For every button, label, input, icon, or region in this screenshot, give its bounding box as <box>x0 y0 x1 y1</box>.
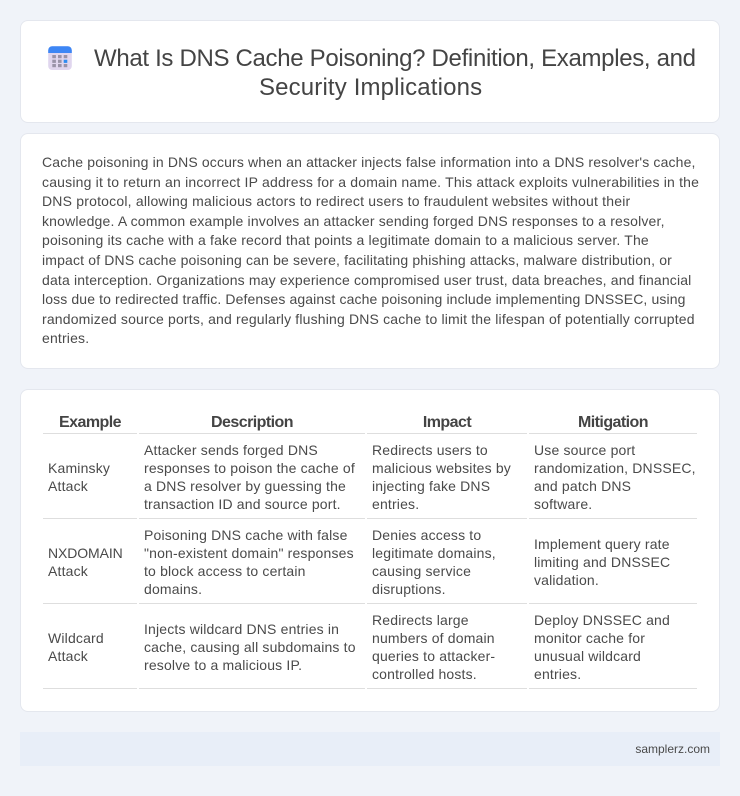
table row: Kaminsky Attack: software. <box>534 496 592 512</box>
table row: Wildcard Attack: Attack <box>48 648 88 664</box>
table row: Kaminsky Attack: entries. <box>372 496 419 512</box>
table header: Mitigation <box>578 414 648 431</box>
table row: Kaminsky Attack: Attacker sends forged DNS <box>144 442 318 458</box>
table row: NXDOMAIN Attack <box>43 527 697 604</box>
text block: definition <box>42 154 699 346</box>
table row: Kaminsky Attack: and patch DNS <box>534 478 631 494</box>
table row: Wildcard Attack: Wildcard <box>48 630 104 646</box>
text block: definition: poisoning its cache with a fake record that points a legitimate domain to a malicious server. The <box>42 232 649 248</box>
text block: definition: impact of DNS cache poisoning can be severe, facilitating phishing attacks, malware distribution, or <box>42 252 672 268</box>
table row: Wildcard Attack: queries to attacker- <box>372 648 495 664</box>
table row: Wildcard Attack: Redirects large <box>372 612 469 628</box>
table row: NXDOMAIN Attack: disruptions. <box>372 581 446 597</box>
table row: NXDOMAIN Attack: NXDOMAIN <box>48 545 123 561</box>
table header <box>43 414 697 434</box>
text block: definition: data interception. Organizations may experience compromised user trust, data breaches, and financial <box>42 272 691 288</box>
table row: Kaminsky Attack <box>43 442 697 519</box>
table row: Wildcard Attack: entries. <box>534 666 581 682</box>
icon: calendar <box>48 46 72 70</box>
table row: Wildcard Attack: numbers of domain <box>372 630 495 646</box>
table row: Kaminsky Attack: malicious websites by <box>372 460 511 476</box>
table row: Wildcard Attack: Deploy DNSSEC and <box>534 612 670 628</box>
table row: Kaminsky Attack: Kaminsky <box>48 460 110 476</box>
table header: Impact <box>423 414 471 431</box>
panel: examples table <box>20 389 720 712</box>
table row: Wildcard Attack: resolve to a malicious IP. <box>144 657 302 673</box>
table row: Wildcard Attack: Injects wildcard DNS entries in <box>144 621 339 637</box>
heading: title: What Is DNS Cache Poisoning? Definition, Examples, and <box>94 45 696 72</box>
text block: definition: DNS protocol, allowing malicious actors to redirect users to fraudulent websites without their <box>42 193 630 209</box>
table row: NXDOMAIN Attack: to block access to certain <box>144 563 306 579</box>
text block: definition: loss due to redirected traffic. Defenses against cache poisoning include implementing DNSSEC, using <box>42 291 686 307</box>
table row: NXDOMAIN Attack: Attack <box>48 563 88 579</box>
table row: NXDOMAIN Attack: Poisoning DNS cache with false <box>144 527 348 543</box>
table row: NXDOMAIN Attack: causing service <box>372 563 471 579</box>
panel: title card <box>20 20 720 123</box>
text block: definition: Cache poisoning in DNS occurs when an attacker injects false information into a DNS resolver's cache, <box>42 154 696 170</box>
table row: NXDOMAIN Attack: validation. <box>534 572 599 588</box>
heading: title <box>94 45 696 101</box>
panel: intro paragraph <box>20 133 720 369</box>
table header: Description <box>211 414 293 431</box>
table row: NXDOMAIN Attack: Denies access to <box>372 527 481 543</box>
table row: Kaminsky Attack: a DNS resolver by guessing the <box>144 478 346 494</box>
table row: Kaminsky Attack: transaction ID and source port. <box>144 496 341 512</box>
table row: Kaminsky Attack: Redirects users to <box>372 442 488 458</box>
footer text: site name: samplerz.com <box>635 742 710 756</box>
heading: title: Security Implications <box>259 74 482 101</box>
table row: Wildcard Attack: controlled hosts. <box>372 666 477 682</box>
table row: Kaminsky Attack: responses to poison the cache of <box>144 460 355 476</box>
table row: Wildcard Attack <box>43 612 697 689</box>
table row: Kaminsky Attack: Use source port <box>534 442 635 458</box>
table header: Example <box>59 414 121 431</box>
text block: definition: causing it to return an incorrect IP address for a domain name. This attack exploits vulnerabilities in the <box>42 174 699 190</box>
table row: NXDOMAIN Attack: limiting and DNSSEC <box>534 554 670 570</box>
table row: Kaminsky Attack: injecting fake DNS <box>372 478 490 494</box>
table row: Kaminsky Attack: Attack <box>48 478 88 494</box>
table row: NXDOMAIN Attack: domains. <box>144 581 202 597</box>
footer bar <box>20 732 720 766</box>
table row: Kaminsky Attack: randomization, DNSSEC, <box>534 460 696 476</box>
text block: definition: randomized source ports, and regularly flushing DNS cache to limit the lifespan of potentially corrupted <box>42 311 695 327</box>
table row: NXDOMAIN Attack: legitimate domains, <box>372 545 496 561</box>
table row: Wildcard Attack: cache, causing all subdomains to <box>144 639 356 655</box>
table row: NXDOMAIN Attack: Implement query rate <box>534 536 670 552</box>
table row: Wildcard Attack: monitor cache for <box>534 630 645 646</box>
table row: NXDOMAIN Attack: "non-existent domain" responses <box>144 545 354 561</box>
table row: Wildcard Attack: unusual wildcard <box>534 648 641 664</box>
text block: definition: knowledge. A common example involves an attacker sending forged DNS responses to a resolver, <box>42 213 665 229</box>
text block: definition: entries. <box>42 330 89 346</box>
